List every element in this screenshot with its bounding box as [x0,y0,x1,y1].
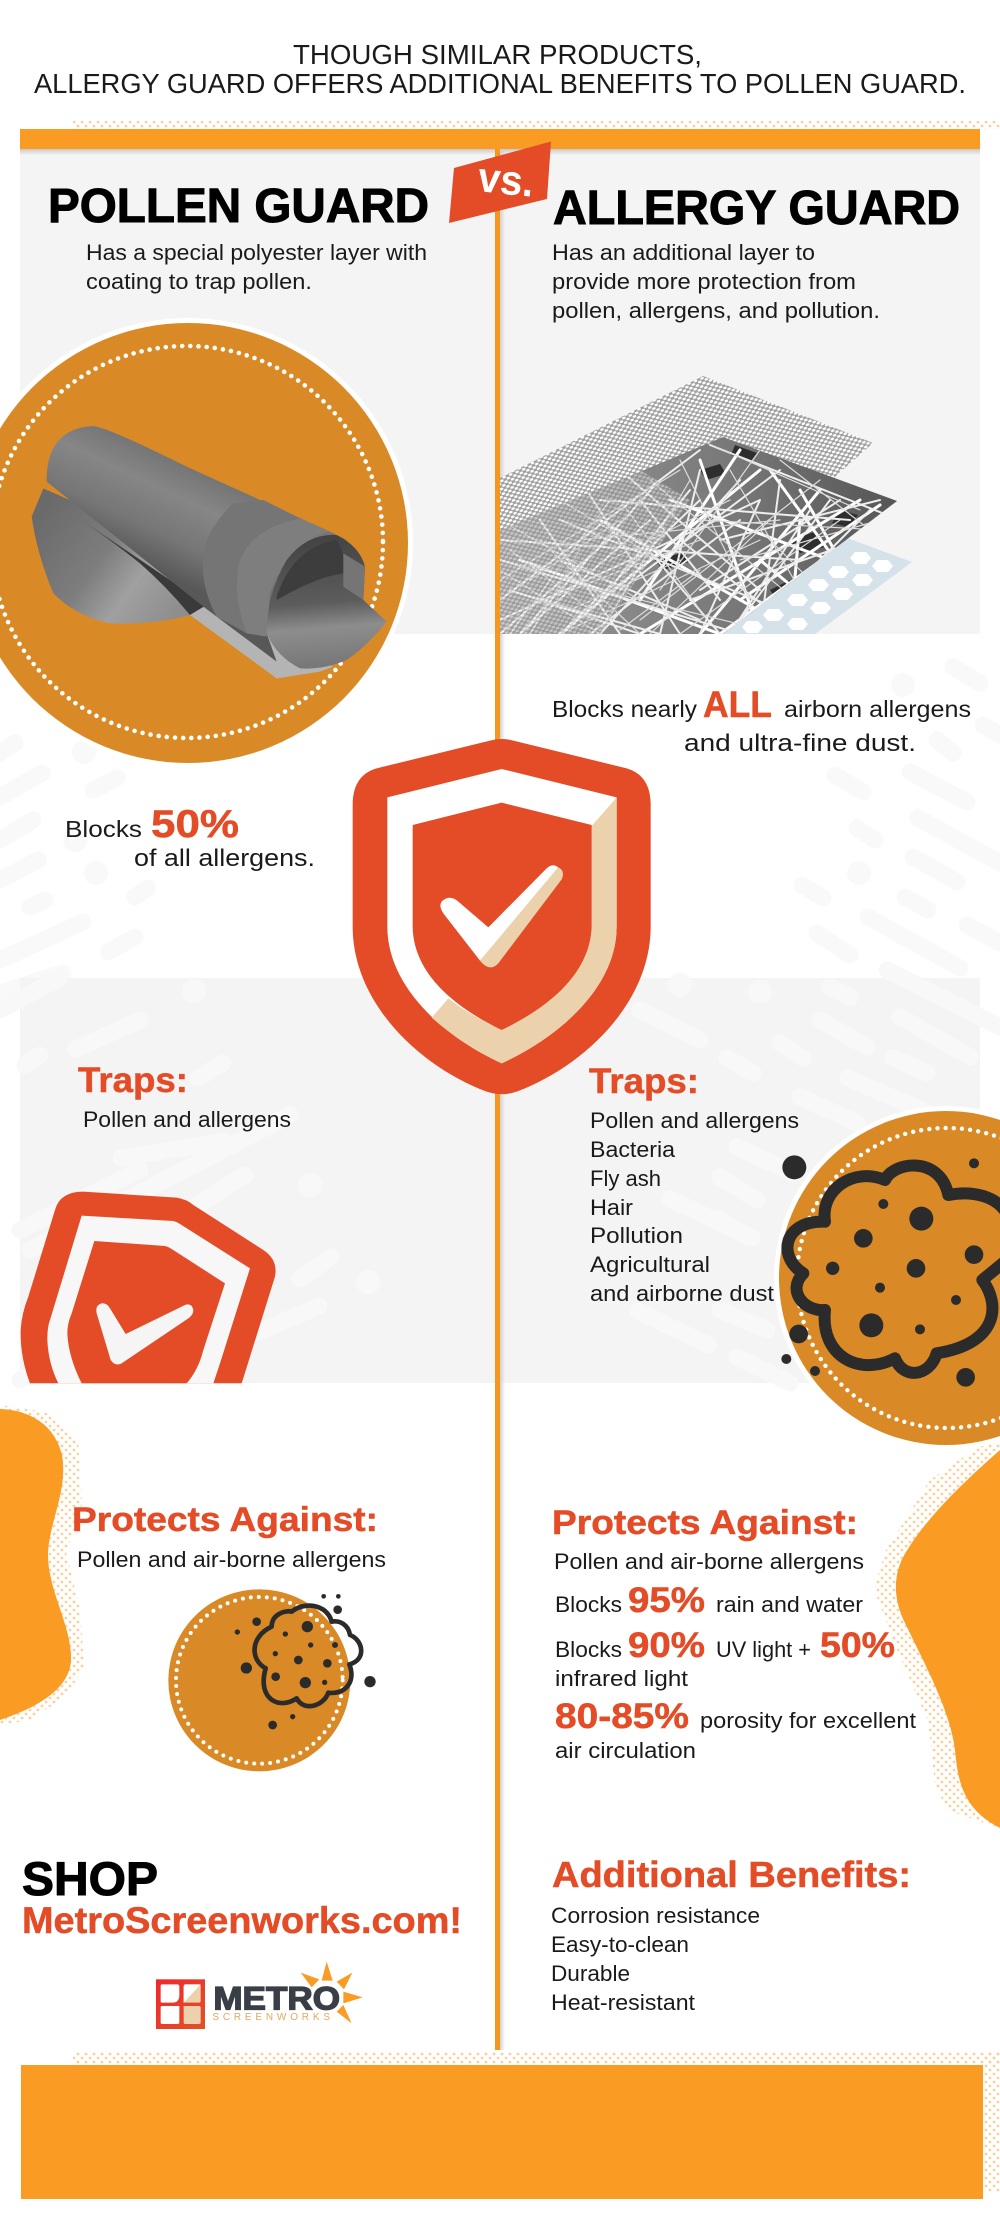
text: traps right: Hair [590,1195,633,1220]
text: protects against right: 95% [628,1581,705,1620]
text: Blocks 50 percent: of all allergens. [134,845,315,872]
icon: large shield with check [353,739,651,1094]
halftone dots: left blob [0,1405,84,1725]
blob: right orange [896,1450,1000,1828]
image: rolled screen mesh [32,426,387,678]
text: Blocks 50 percent [65,803,315,872]
heading: Allergy Guard: ALLERGY GUARD [553,182,960,235]
halftone dots: right blob [874,1432,1000,1828]
logo: Metro Screenworks: METRO [213,1980,340,2016]
text: traps right: Traps: [589,1062,699,1101]
image: layered allergy guard mesh [500,376,912,634]
text: Blocks 50 percent: Blocks [65,816,142,842]
title: THOUGH SIMILAR PRODUCTS, [293,39,702,70]
text: protects against right: UV light + [716,1637,811,1662]
text: protects against right: Blocks [555,1592,622,1617]
text: Allergy Guard description: provide more protection from [552,269,856,294]
text: Blocks nearly all: ALL [703,684,772,725]
text: traps right: Agricultural [590,1252,710,1277]
text: protects against right: infrared light [555,1666,688,1691]
text: Pollen Guard description: Has a special polyester layer with [86,240,427,265]
text: Pollen Guard description: coating to trap pollen. [86,269,312,294]
text: protects against right: Protects Against: [552,1504,858,1542]
text: traps right [589,1062,799,1306]
text: additional benefits: Corrosion resistance [551,1903,760,1928]
text: traps left: Pollen and allergens [83,1107,291,1132]
call to action: shop: MetroScreenworks.com! [22,1900,462,1941]
text: traps right: and airborne dust [590,1281,774,1306]
text: traps right: Fly ash [590,1166,661,1191]
text: Allergy Guard description [552,240,880,323]
text: Blocks nearly all: airborn allergens [784,696,971,722]
text: traps left: Traps: [78,1061,188,1100]
circle: large bacteria icon [774,1106,1000,1450]
heading: Pollen Guard: POLLEN GUARD [48,180,429,233]
text: protects against left [72,1501,386,1572]
center divider line [495,149,505,2050]
panel: top comparison background [20,149,980,634]
call to action: shop [22,1852,462,1941]
text: Blocks 50 percent: 50% [151,803,239,846]
bar: top orange header [20,129,980,149]
text: Allergy Guard description: Has an additional layer to [552,240,815,265]
icon: small bacteria circle [168,1589,376,1771]
text: additional benefits: Heat-resistant [551,1990,695,2015]
text: protects against left: Protects Against: [72,1501,378,1539]
text: traps left [78,1061,291,1132]
text: Blocks nearly all: Blocks nearly [552,696,698,722]
badge: vs: vs. [476,153,536,206]
text: additional benefits: Durable [551,1961,630,1986]
bar: bottom orange footer [21,2065,983,2199]
halftone dots: top [73,121,1000,129]
panel: traps background [20,978,980,1383]
text: protects against right: rain and water [716,1592,863,1617]
text: additional benefits [551,1854,911,2015]
logo: Metro Screenworks: SCREENWORKS [212,2012,330,2023]
text: protects against right: Pollen and air-borne allergens [554,1549,864,1574]
blob: left orange [0,1409,71,1720]
text: Allergy Guard description: pollen, allergens, and pollution. [552,298,880,323]
text: protects against right: porosity for excellent [700,1708,916,1733]
text: protects against right: 90% [628,1626,705,1665]
text: protects against right: air circulation [555,1738,696,1763]
title [34,39,966,99]
text: Blocks nearly all [552,684,971,757]
text: additional benefits: Additional Benefits: [552,1854,911,1895]
call to action: shop: SHOP [22,1852,158,1905]
text: traps right: Pollution [590,1223,683,1248]
text: protects against right: 80-85% [555,1697,689,1736]
text: protects against right: Blocks [555,1637,622,1662]
text: protects against right [552,1504,916,1763]
icon: cropped small shield [21,1192,276,1383]
badge: vs [449,142,551,223]
text: additional benefits: Easy-to-clean [551,1932,689,1957]
text: traps right: Bacteria [590,1137,676,1162]
text: Pollen Guard description [86,240,427,294]
halftone dots: bottom [73,2052,1000,2192]
text: protects against right: 50% [820,1626,895,1665]
text: protects against left: Pollen and air-borne allergens [77,1547,386,1572]
text: Blocks nearly all: and ultra-fine dust. [684,730,916,757]
circle: pollen guard product [0,318,413,768]
text: traps right: Pollen and allergens [590,1108,799,1133]
title: ALLERGY GUARD OFFERS ADDITIONAL BENEFITS TO POLLEN GUARD. [34,68,966,99]
logo: Metro Screenworks [156,1962,363,2029]
